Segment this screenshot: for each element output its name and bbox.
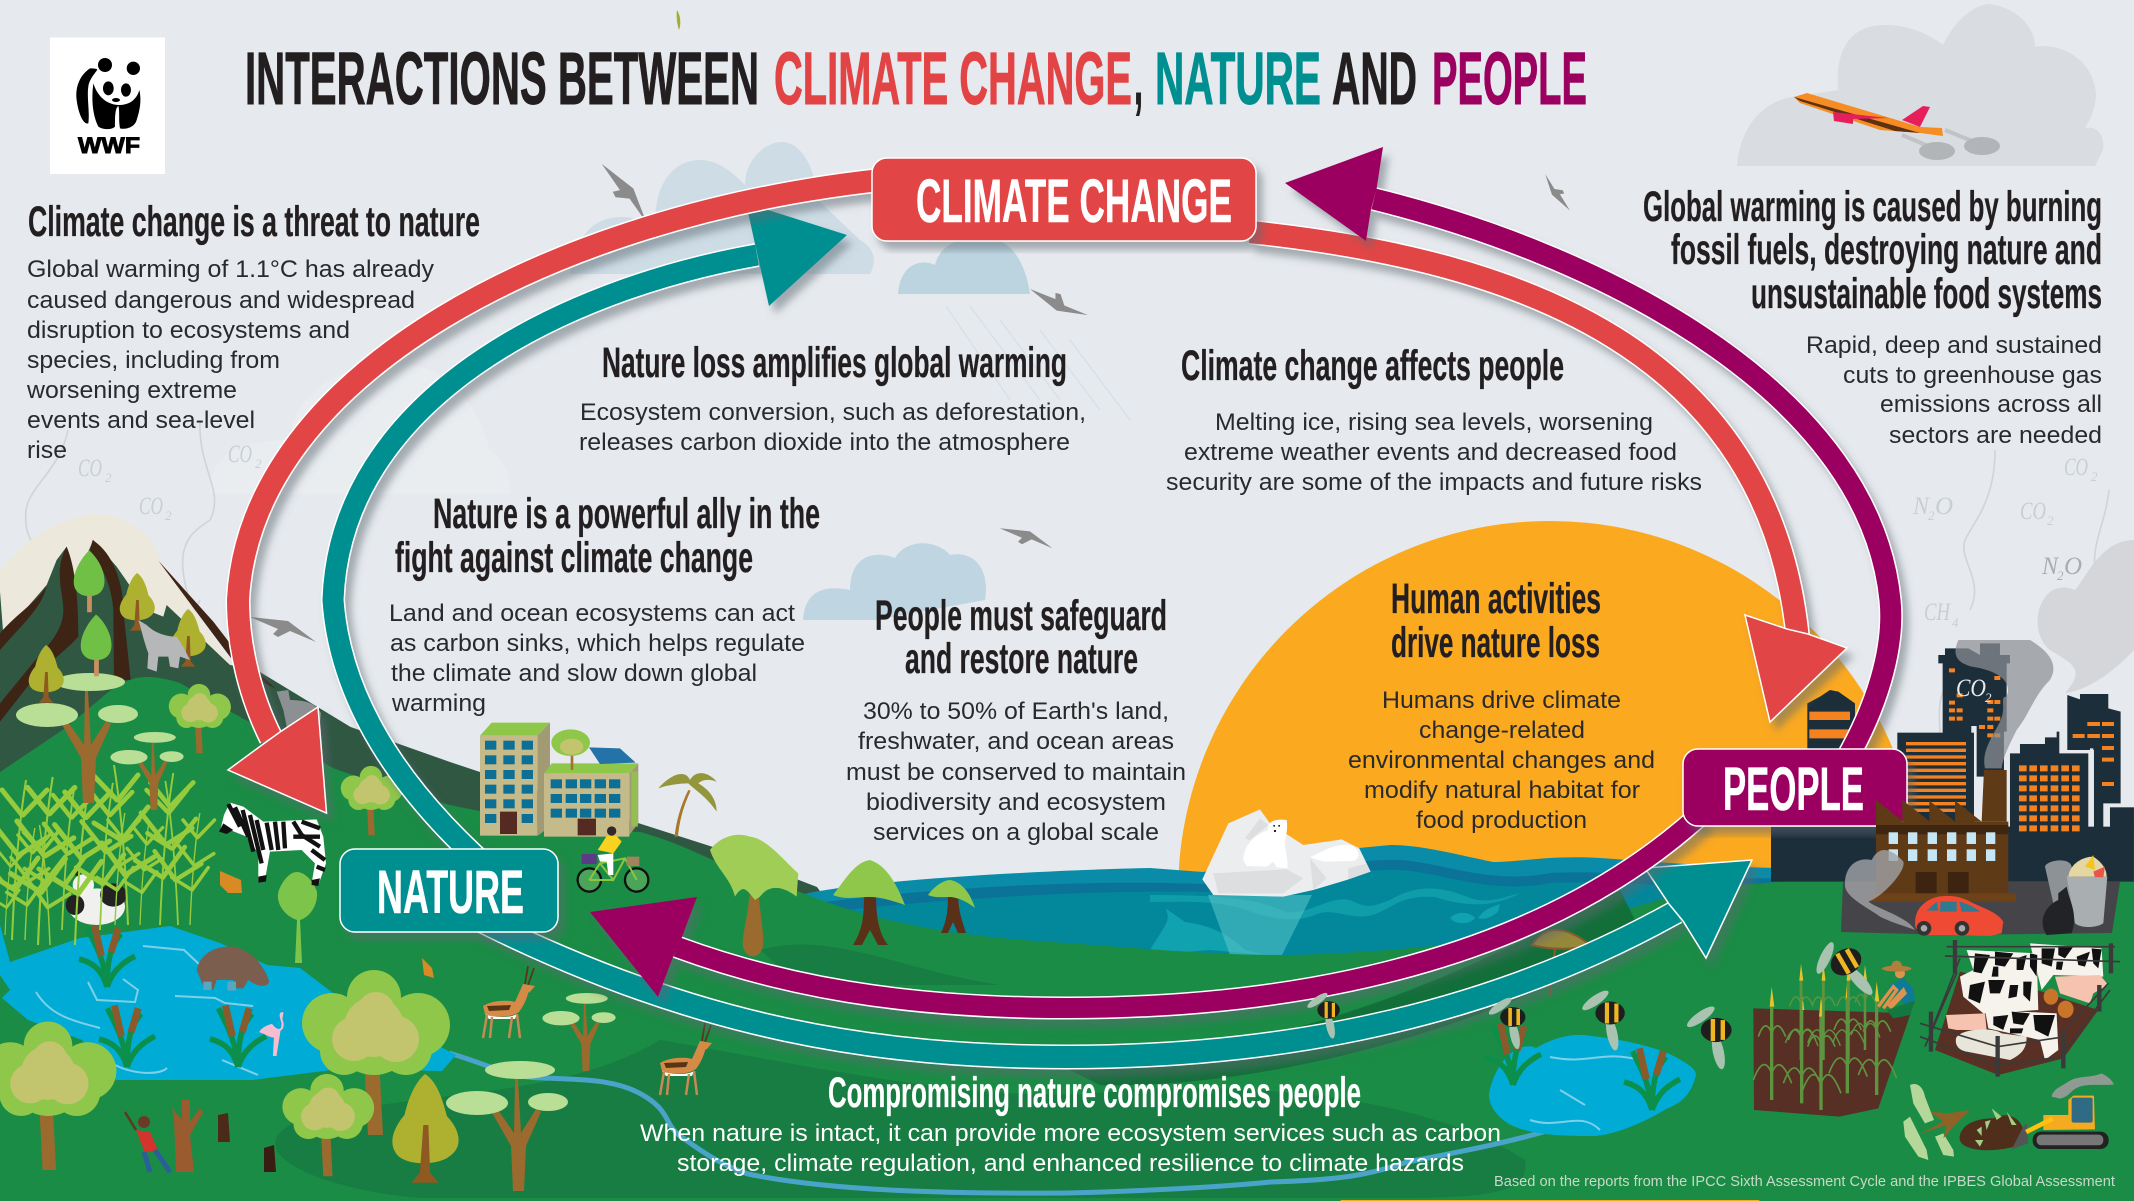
text block: people must safeguard: services on a global scale <box>873 819 1159 846</box>
snow cap <box>0 514 233 710</box>
CO2 label over smoke: CO <box>1956 675 1986 702</box>
low block side <box>629 763 638 835</box>
text block: climate change is a threat to nature: Global warming of 1.1°C has already <box>27 256 434 283</box>
text block: climate change affects people: security are some of the impacts and future risks <box>1166 469 1702 496</box>
ground <box>1935 972 2098 1075</box>
pig front <box>1946 1013 1987 1030</box>
land <box>0 677 2134 1200</box>
exhaust <box>2052 1073 2114 1099</box>
title: PEOPLE <box>1432 37 1587 120</box>
text block: climate change is a threat to nature: species, including from <box>27 347 280 374</box>
box: climate change <box>872 158 1256 241</box>
text block: climate change is a threat to nature: worsening extreme <box>26 377 237 404</box>
text block: people must safeguard: must be conserved to maintain <box>846 759 1186 786</box>
gap <box>2092 748 2107 833</box>
cloud: blue, behind climate change box <box>570 142 874 274</box>
title: INTERACTIONS BETWEEN <box>245 37 759 120</box>
bee 2 <box>1487 995 1525 1050</box>
body <box>1876 822 2008 897</box>
gas drift lines <box>26 420 2109 780</box>
acacia: centre <box>542 993 616 1071</box>
butterfly 2 <box>422 958 434 978</box>
stump 2 <box>264 1145 276 1172</box>
greenhouse gas labels <box>78 441 2098 630</box>
source note: Based on the reports from the IPCC Sixth Assessment Cycle and the IPBES Global Assessment <box>1494 1173 2116 1190</box>
greenhouse gas labels: CH <box>1924 599 1951 626</box>
iceberg with polar bears <box>1202 809 1371 897</box>
pond right <box>1485 1023 1696 1136</box>
arrow: nature to people (teal, lower) <box>480 860 1752 1057</box>
felled crowns <box>1903 1084 1954 1160</box>
greenhouse gas labels: CO <box>2064 454 2088 481</box>
text block: people must safeguard <box>846 592 1186 846</box>
water <box>0 925 456 1080</box>
bee 4 <box>1684 1003 1732 1070</box>
greenhouse gas labels: 2 <box>2047 513 2054 528</box>
exhaust puffs <box>1919 137 2000 160</box>
round tree: far left <box>0 1022 116 1170</box>
text block: global warming causes <box>1643 183 2102 449</box>
nitrous oxide label on smoke <box>2041 553 2082 583</box>
green tree <box>278 872 317 963</box>
text block: nature is a powerful ally: as carbon sinks, which helps regulate <box>390 630 805 657</box>
greenhouse gas labels: CO <box>78 455 102 482</box>
WWF wordmark: WWF <box>78 133 140 158</box>
greenhouse gas labels: 2 <box>255 456 262 471</box>
text block: climate change is a threat to nature: caused dangerous and widespread <box>27 287 415 314</box>
arrow: climate change to people (red, right) <box>1250 232 1847 722</box>
bulldozer <box>2012 1096 2109 1149</box>
bird 2 <box>1030 273 1088 331</box>
saw-tooth roof <box>1876 800 1982 822</box>
ice <box>1202 809 1371 897</box>
fish <box>1450 904 1500 923</box>
animals <box>138 620 712 1095</box>
mountain tree 5 <box>29 645 64 703</box>
iceberg underwater <box>1208 895 1312 955</box>
text block: human activities drive nature loss: change-related <box>1419 717 1585 744</box>
sun <box>1178 521 1922 1201</box>
stepped block <box>2010 732 2088 830</box>
factory <box>1869 770 2016 902</box>
nitrous oxide label on smoke: O <box>2064 553 2082 580</box>
wheels <box>578 868 648 892</box>
text block: nature is a powerful ally: warming <box>391 690 486 717</box>
river <box>449 1053 1570 1193</box>
far hillside strip <box>230 665 830 905</box>
text block: nature is a powerful ally: fight against climate change <box>395 534 753 582</box>
text block: compromising nature compromises people: storage, climate regulation, and enhanced resilience to climate hazards <box>677 1150 1464 1177</box>
box: people <box>1683 749 1907 826</box>
rubbish <box>2068 857 2107 877</box>
gazelle 1 <box>483 966 535 1038</box>
doors <box>1916 872 1969 893</box>
text block: climate change affects people <box>1166 342 1702 496</box>
bee 5 <box>1803 930 1881 1015</box>
ocean <box>800 845 1790 960</box>
trash cans <box>2043 855 2107 935</box>
zebra <box>219 803 326 886</box>
tower front <box>480 736 537 836</box>
text block: compromising nature compromises people <box>640 1069 1501 1177</box>
text block: nature loss amplifies global warming <box>579 339 1086 456</box>
WWF logo <box>50 38 165 174</box>
bird 5 <box>250 617 316 642</box>
front can <box>2067 877 2107 927</box>
mountain tree 4 <box>171 609 206 667</box>
panda in bamboo <box>66 869 127 925</box>
cloud: large grey, top right <box>1737 4 2103 166</box>
arrow: climate change to nature (red) <box>228 180 880 813</box>
box: nature: NATURE <box>377 858 524 926</box>
panda <box>76 58 140 129</box>
text block: climate change affects people: Melting ice, rising sea levels, worsening <box>1215 409 1653 436</box>
wolf lower <box>277 690 321 727</box>
debris leaves <box>1975 1108 2017 1147</box>
gazelle 2 <box>660 1023 712 1095</box>
trees <box>0 550 1590 1191</box>
green wall <box>631 772 638 827</box>
smoke clouds right <box>2038 540 2134 693</box>
water <box>1489 1035 1696 1136</box>
greenhouse gas labels: 2 <box>105 470 112 485</box>
dolphin <box>1150 908 1265 955</box>
grey ground <box>1841 882 2120 935</box>
cattail 3 <box>210 1005 266 1067</box>
tower side <box>537 723 550 836</box>
fence <box>1920 940 2120 1077</box>
tower roof <box>480 723 550 736</box>
text block: nature is a powerful ally <box>389 490 820 717</box>
hippo <box>197 946 269 991</box>
deforestation and bulldozer <box>1903 1073 2114 1160</box>
flamingo <box>261 1013 283 1055</box>
text block: climate change is a threat to nature: rise <box>27 437 67 464</box>
roof tree <box>551 729 590 770</box>
livestock pen <box>1920 940 2120 1077</box>
doors <box>500 812 596 835</box>
white panel <box>50 38 165 174</box>
cattail left <box>1485 1023 1541 1085</box>
city base <box>1771 827 2134 882</box>
text block: global warming causes: cuts to greenhouse gas <box>1843 362 2102 389</box>
dark band <box>800 860 1790 960</box>
palm large <box>710 835 798 956</box>
text block: people must safeguard: biodiversity and ecosystem <box>866 789 1166 816</box>
striped block <box>1897 733 1974 829</box>
mangrove 2 <box>928 880 975 933</box>
arrow: people to climate change (purple, top) <box>1285 147 1891 760</box>
dead tree <box>172 1100 203 1172</box>
ice shade <box>1213 818 1370 893</box>
round tree: hill <box>169 684 231 753</box>
savanna shrub <box>1532 930 1590 995</box>
bee 3 <box>1580 987 1625 1052</box>
wing <box>1833 112 1888 124</box>
wolf upper <box>138 620 190 672</box>
mountain tree 2 <box>81 614 111 676</box>
greenhouse gas labels: 2 <box>2091 469 2098 484</box>
chimney <box>1982 770 2007 822</box>
car <box>1915 896 2003 936</box>
greenhouse gas labels: CO <box>2020 498 2046 525</box>
text block: people must safeguard: and restore nature <box>905 635 1138 683</box>
text block: climate change is a threat to nature <box>26 198 480 464</box>
text block: nature loss amplifies global warming: Ecosystem conversion, such as deforestation, <box>580 399 1086 426</box>
rider <box>598 826 622 875</box>
text block: global warming causes: sectors are needed <box>1889 422 2102 449</box>
greenhouse gas labels: 4 <box>1952 615 1959 630</box>
title: , <box>1134 37 1143 120</box>
ripples <box>1530 1056 1640 1130</box>
fuselage <box>1794 93 1943 136</box>
palm small <box>658 773 717 837</box>
text block: compromising nature compromises people: Compromising nature compromises people <box>828 1069 1361 1117</box>
lumberjack and stumps <box>125 1100 276 1172</box>
text block: nature loss amplifies global warming: Nature loss amplifies global warming <box>602 339 1067 387</box>
cattail 2 <box>99 1005 155 1067</box>
distant tower <box>1807 690 1855 750</box>
text block: human activities drive nature loss <box>1348 575 1655 834</box>
soil <box>1753 1008 1911 1117</box>
farmer <box>1878 961 1915 1018</box>
acacia: hill small <box>110 732 184 810</box>
text block: nature is a powerful ally: the climate and slow down global <box>391 660 757 687</box>
corn field <box>1753 964 1911 1117</box>
text block: human activities drive nature loss: food production <box>1416 807 1587 834</box>
main water <box>800 870 1790 960</box>
nitrous oxide label on smoke: 2 <box>2057 568 2064 583</box>
text block: climate change affects people: Climate change affects people <box>1181 342 1564 390</box>
orange windows <box>1906 668 2114 831</box>
text block: climate change is a threat to nature: Climate change is a threat to nature <box>28 198 480 246</box>
box: people: PEOPLE <box>1723 755 1864 823</box>
text block: human activities drive nature loss: Humans drive climate <box>1382 687 1621 714</box>
small leaf at top <box>677 10 680 30</box>
bamboo <box>0 765 214 945</box>
corn plants <box>1753 987 1792 1100</box>
chickens <box>2044 989 2074 1018</box>
bees <box>1306 930 1881 1070</box>
cloud: faint, left <box>210 364 510 494</box>
text block: compromising nature compromises people: When nature is intact, it can provide more ecosystem services such as carbon <box>640 1120 1501 1147</box>
mountain tree 3 <box>120 573 155 631</box>
polar bear standing <box>1243 820 1288 868</box>
dark green patches <box>275 890 1640 1198</box>
basket <box>627 857 639 866</box>
mangrove 1 <box>833 860 905 945</box>
base <box>1869 893 2016 902</box>
birds <box>250 164 1579 642</box>
felled trunk <box>1919 1110 1970 1138</box>
windows <box>1889 832 1995 861</box>
stripe <box>1794 97 1920 133</box>
box: nature <box>340 849 558 932</box>
water body top layer <box>800 845 1790 960</box>
bag <box>582 854 597 864</box>
title: CLIMATE CHANGE <box>774 37 1132 120</box>
chimney smoke <box>1955 640 2053 768</box>
bee 1 <box>1306 991 1340 1039</box>
text block: human activities drive nature loss: modify natural habitat for <box>1364 777 1640 804</box>
low block front <box>544 773 629 837</box>
text block: people must safeguard: People must safeguard <box>875 592 1167 640</box>
greenhouse gas labels: O <box>1935 493 1953 520</box>
text block: global warming causes: emissions across all <box>1880 391 2102 418</box>
acacia: bottom <box>446 1061 568 1191</box>
text block: human activities drive nature loss: Human activities <box>1391 575 1601 623</box>
bird 4 <box>1000 528 1052 548</box>
acacia: hill tall <box>16 673 138 803</box>
arrow: people to nature (purple) <box>590 815 1700 1008</box>
mountain <box>0 514 367 773</box>
text block: people must safeguard: freshwater, and ocean areas <box>858 728 1174 755</box>
greenhouse gas labels: 2 <box>165 508 172 523</box>
text block: people must safeguard: 30% to 50% of Earth's land, <box>863 698 1169 725</box>
roof shadow <box>1876 825 2008 834</box>
debris <box>1960 1115 2023 1150</box>
windows <box>485 741 620 823</box>
pig back <box>2055 975 2108 1003</box>
light wave <box>1150 888 1520 919</box>
right tower <box>2067 694 2121 832</box>
cow back right <box>2030 943 2103 990</box>
bin bag <box>2043 887 2074 935</box>
text block: global warming causes: Rapid, deep and sustained <box>1806 332 2102 359</box>
nitrous oxide label on smoke: N <box>2041 553 2059 580</box>
cloud: blue, centre <box>803 543 986 620</box>
water ripples <box>36 946 258 1075</box>
conifer olive <box>392 1074 459 1183</box>
tall tower <box>1938 643 2010 777</box>
contrails <box>1902 130 1977 148</box>
butterfly 1 <box>220 871 242 893</box>
low block roof <box>544 763 638 773</box>
bird 3 <box>1536 174 1579 210</box>
gap <box>1974 726 2007 790</box>
round tree: lower middle <box>282 1074 374 1176</box>
mountain tree 1 <box>74 550 104 612</box>
cattail right <box>1624 1048 1680 1110</box>
text block: nature loss amplifies global warming: releases carbon dioxide into the atmosphere <box>579 429 1070 456</box>
solar panel <box>589 747 636 764</box>
text block: climate change affects people: extreme weather events and decreased food <box>1184 439 1677 466</box>
bear face <box>1273 825 1280 832</box>
city <box>1771 643 2134 882</box>
ground smoke <box>1845 850 1915 930</box>
title: AND <box>1332 37 1417 120</box>
mountain rock <box>0 540 367 773</box>
sheep <box>1956 1029 2027 1060</box>
text block: climate change is a threat to nature: disruption to ecosystems and <box>27 317 350 344</box>
polar bear lying <box>1310 845 1359 862</box>
airplane <box>1794 93 2000 160</box>
stump 1 <box>218 1113 230 1142</box>
text block: human activities drive nature loss: drive nature loss <box>1391 619 1600 667</box>
back can <box>2045 860 2073 903</box>
text block: nature is a powerful ally: Land and ocean ecosystems can act <box>389 600 795 627</box>
CO2 label over smoke: 2 <box>1985 690 1992 705</box>
tail <box>1902 106 1930 127</box>
cattail 1 <box>79 925 135 987</box>
frame <box>589 858 637 880</box>
pond left <box>0 925 456 1080</box>
text block: nature is a powerful ally: Nature is a powerful ally in the <box>433 490 820 538</box>
rock stripes <box>0 540 340 733</box>
title: NATURE <box>1155 37 1321 120</box>
greenhouse gas labels: 2 <box>1928 508 1935 523</box>
woodcutter <box>125 1112 170 1172</box>
arrow: nature to climate change (teal, upper) <box>333 203 847 870</box>
rain lines <box>946 306 1130 420</box>
cow back left <box>1960 950 2038 1013</box>
tower windows <box>1809 712 1850 738</box>
cloud: blue, under climate change box <box>898 237 1030 294</box>
green building <box>480 723 638 837</box>
greenhouse gas labels: CO <box>139 493 163 520</box>
text block: human activities drive nature loss: environmental changes and <box>1348 747 1655 774</box>
cow front <box>1985 1010 2058 1060</box>
smoke <box>1845 640 2053 930</box>
cyclist <box>578 826 648 892</box>
box: climate change: CLIMATE CHANGE <box>916 167 1232 235</box>
greenhouse gas labels: N <box>1912 493 1930 520</box>
round tree: large <box>302 970 450 1135</box>
greenhouse gas labels: CO <box>228 441 252 468</box>
bird 1 <box>588 164 661 223</box>
text block: climate change is a threat to nature: events and sea-level <box>27 407 255 434</box>
round tree: by arrow <box>341 766 403 835</box>
